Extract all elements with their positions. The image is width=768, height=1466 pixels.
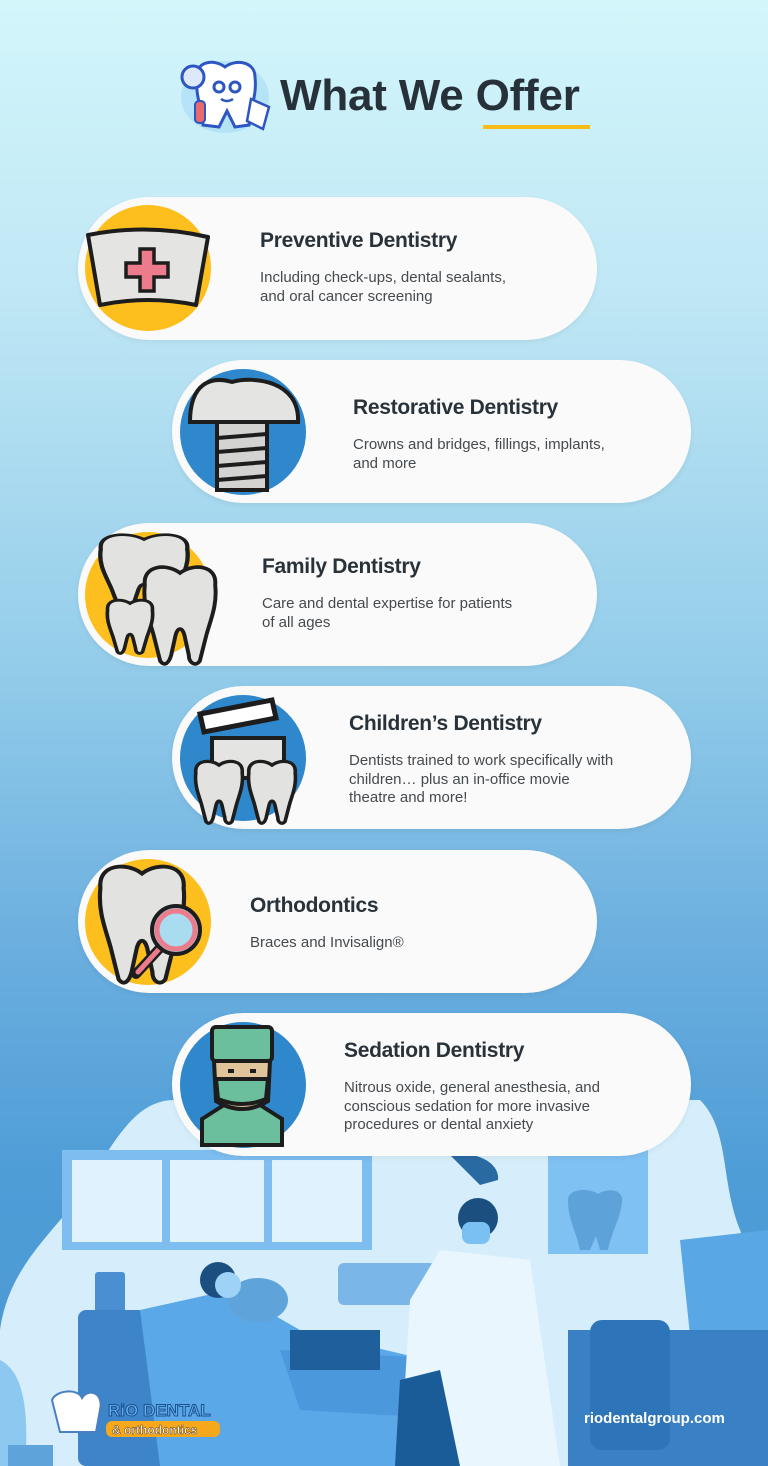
header: mascot and title — [180, 60, 590, 133]
card: Children's Dentistry: theatre and more! — [349, 789, 467, 806]
logo: Rio Dental & Orthodontics: RiO DENTAL — [108, 1401, 211, 1420]
card: Family Dentistry: Care and dental expertise for patients — [262, 595, 512, 612]
card: Sedation Dentistry: Nitrous oxide, general anesthesia, and — [344, 1079, 600, 1096]
card: Family Dentistry: of all ages — [262, 614, 330, 630]
card: Children's Dentistry: Dentists trained to work specifically with — [349, 752, 613, 769]
card: Orthodontics — [78, 850, 597, 993]
card: Restorative Dentistry — [172, 360, 691, 503]
card: Family Dentistry — [78, 523, 597, 666]
title: What We Offer — [280, 71, 580, 120]
card: Sedation Dentistry: procedures or dental anxiety — [344, 1116, 533, 1133]
card: Children's Dentistry: Children’s Dentistry — [349, 712, 542, 735]
card: Restorative Dentistry: Restorative Dentistry — [353, 396, 558, 419]
card: Children's Dentistry: children… plus an in-office movie — [349, 770, 570, 788]
card: Preventive Dentistry — [78, 197, 597, 340]
card: Preventive Dentistry: Including check-ups, dental sealants, — [260, 269, 506, 286]
card: Restorative Dentistry: and more — [353, 454, 416, 472]
icon: tooth with magnifier — [85, 859, 211, 985]
logo: Rio Dental & Orthodontics — [52, 1391, 220, 1437]
card: Sedation Dentistry: conscious sedation for more invasive — [344, 1098, 590, 1114]
website url: riodentalgroup.com — [584, 1410, 725, 1427]
card: Preventive Dentistry: and oral cancer screening — [260, 288, 433, 304]
icon: family teeth — [85, 532, 218, 666]
card: Sedation Dentistry — [172, 1013, 691, 1156]
card: Sedation Dentistry: Sedation Dentistry — [344, 1039, 524, 1062]
icon: tooth mascot — [180, 60, 270, 133]
icon: clapperboard and teeth — [180, 695, 306, 825]
icon: nurse cap — [85, 205, 211, 331]
card: Preventive Dentistry: Preventive Dentistry — [260, 229, 457, 252]
card: Restorative Dentistry: Crowns and bridges, fillings, implants, — [353, 436, 605, 453]
icon: surgeon — [180, 1022, 306, 1148]
card: Family Dentistry: Family Dentistry — [262, 555, 421, 578]
card: Orthodontics: Orthodontics — [250, 894, 378, 917]
logo: Rio Dental & Orthodontics: & orthodontics — [112, 1423, 198, 1437]
card: Children's Dentistry — [172, 686, 691, 829]
icon: dental implant — [180, 369, 306, 495]
card: Orthodontics: Braces and Invisalign® — [250, 934, 404, 951]
title underline — [483, 125, 590, 129]
